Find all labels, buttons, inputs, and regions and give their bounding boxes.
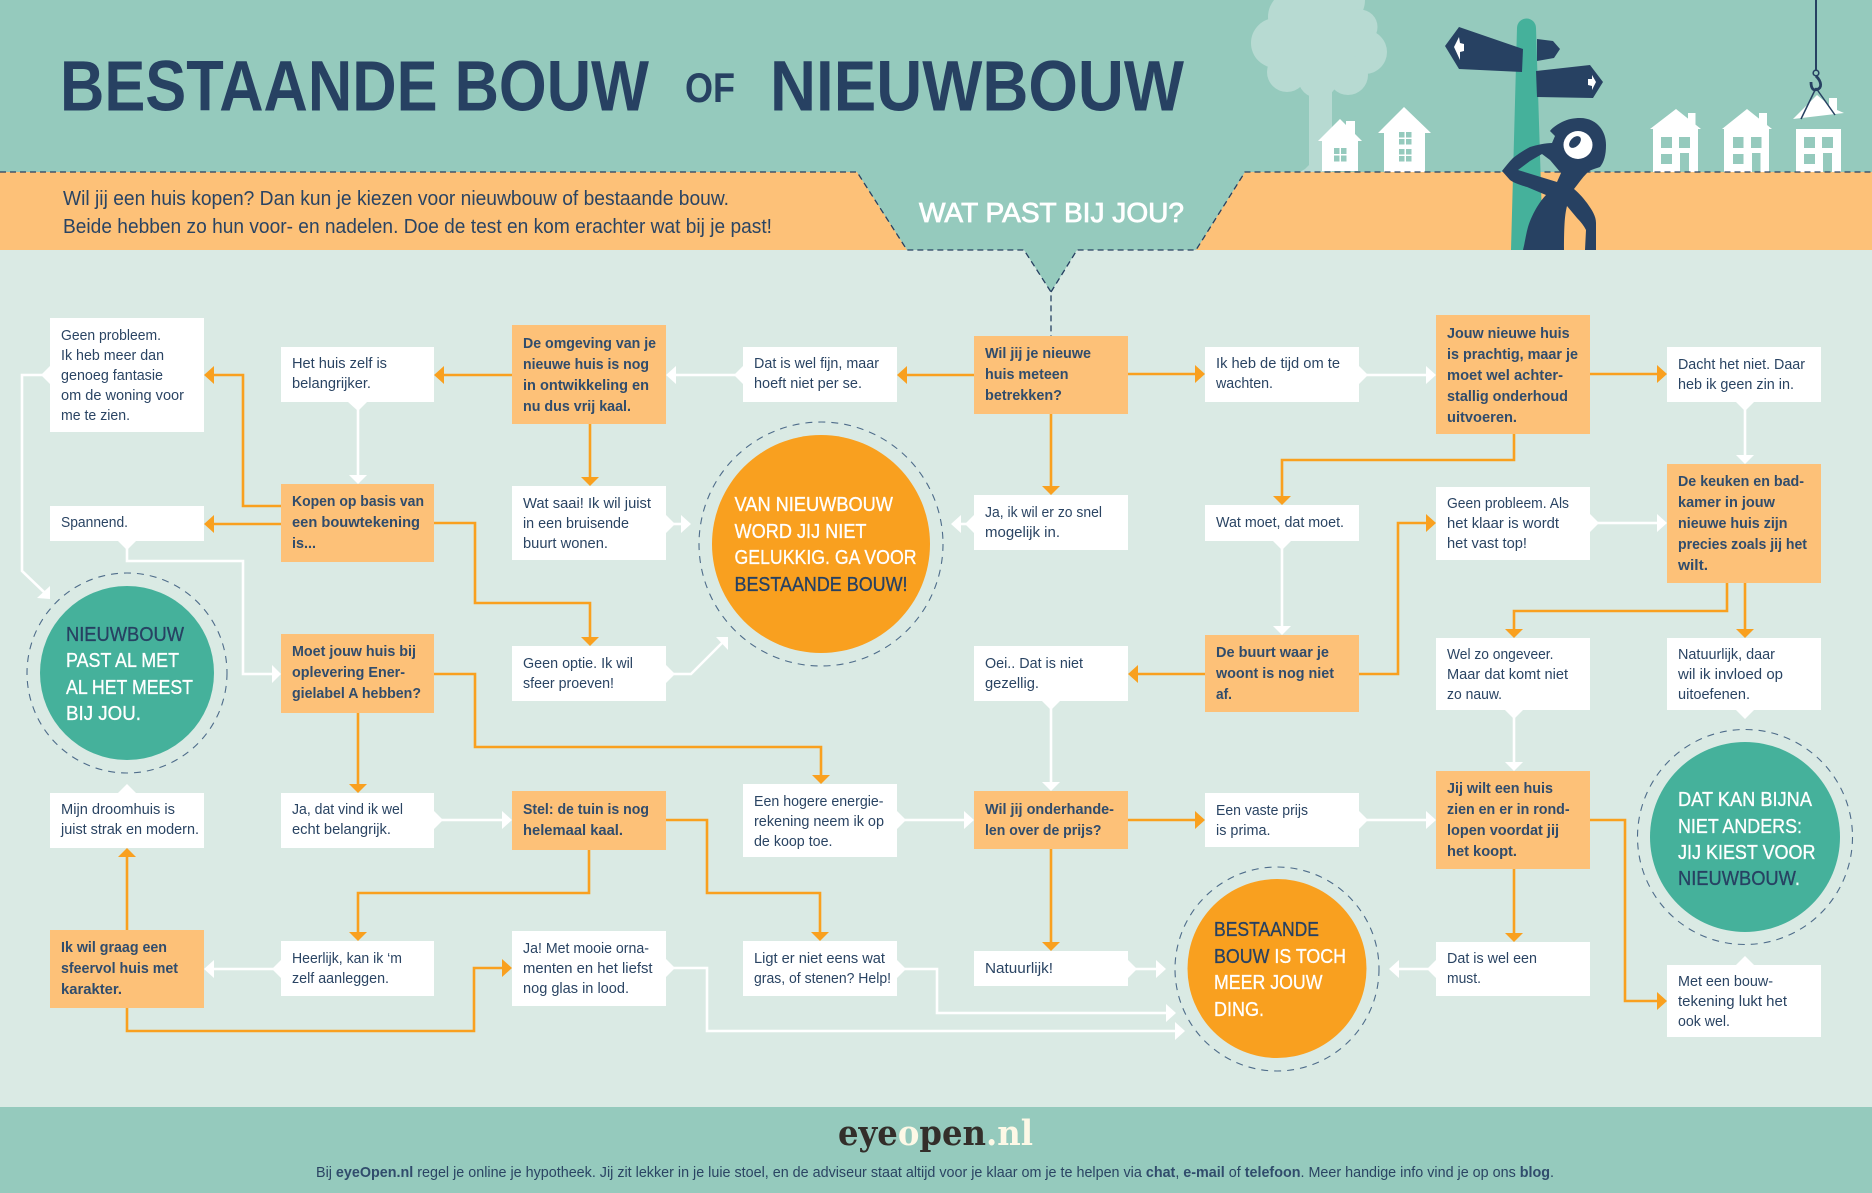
result circle: van nieuwbouw word jij niet gelukkig: BESTAANDE BOUW! [734,574,908,596]
arrow: wil jij to dat is wel fijn [897,366,974,384]
question: de omgeving: De omgeving van je [523,335,656,352]
question: de keuken en badkamer: nieuwe huis zijn [1678,515,1788,532]
illustration: three white houses right [1650,109,1841,172]
answer: ligt er niet eens wat gras [743,941,897,996]
result circle: van nieuwbouw word jij niet gelukkig: GELUKKIG. GA VOOR [734,547,916,569]
arrow: natuurlijk to oranje cirkel [1128,960,1166,978]
title: OF [685,64,735,111]
illustration: thinking person [1502,118,1606,250]
answer: een vaste prijs [1205,793,1359,847]
answer: heerlijk: Heerlijk, kan ik ‘m [292,950,402,967]
arrow: wil jij to ik heb de tijd [1128,365,1205,383]
answer: dat is wel fijn: Dat is wel fijn, maar [754,355,879,372]
answer: ja met mooie ornamenten: nog glas in lood. [523,980,629,997]
arrow: wil jij to ja ik wil [1042,414,1060,495]
arrow: spannend to moet jouw huis [118,541,281,683]
answer: een vaste prijs: Een vaste prijs [1216,802,1308,819]
question: wil jij onderhandelen [974,791,1128,849]
answer: ligt er niet eens wat gras: Ligt er niet eens wat [754,950,886,967]
question: de omgeving: nieuwe huis is nog [523,356,649,373]
arrow: omgeving to het huis [434,366,512,384]
arrow: het huis to kopen [348,402,367,484]
arrow: must to oranje cirkel [1389,960,1436,978]
answer: ja dat vind ik wel: Ja, dat vind ik wel [292,801,403,818]
answer: oei dat is niet gezellig: gezellig. [985,675,1039,692]
answer: ja met mooie ornamenten [512,931,666,1006]
answer: geen optie: Geen optie. Ik wil [523,655,633,672]
band: orange right [1196,172,1872,250]
question: jij wilt een huis zien: Jij wilt een huis [1447,780,1553,797]
title [60,48,1184,126]
answer: dat is wel een must: must. [1447,970,1481,987]
answer: ja dat vind ik wel [281,793,434,848]
arrow: heerlijk to ik wil graag [204,960,281,978]
arrow: onderhandelen to vaste prijs [1128,811,1205,829]
result circle: bestaande bouw is toch meer jouw ding: DING. [1214,999,1264,1021]
answer: natuurlijk daar wil ik invloed op: wil ik invloed op [1677,666,1783,683]
answer: dat is wel een must [1436,942,1590,996]
answer: ja ik wil er zo snel [974,495,1128,550]
answer: geen optie: sfeer proeven! [523,675,614,692]
arrow: de buurt to geen probleem als [1359,514,1436,674]
answer: het huis zelf: Het huis zelf is [292,355,387,372]
question: kopen op basis van een bouwtekening: is... [292,535,316,552]
result circle: dat kan bijna niet anders: DAT KAN BIJNA [1678,789,1813,811]
illustration: roof on crane hook [1793,0,1844,119]
question: de buurt waar je woont: af. [1216,686,1232,703]
answer: heerlijk: zelf aanleggen. [292,970,389,987]
question: stel de tuin: Stel: de tuin is nog [523,801,649,818]
arrow: oei to onderhandelen [1042,701,1060,791]
arrow: hogere energierekening to onderhandelen [897,811,974,829]
answer: natuurlijk [974,951,1128,986]
arrow: stel to heerlijk [349,850,589,941]
arrow: moet jouw huis to ja dat vind [349,713,367,793]
question: ik wil graag een sfeervol huis: Ik wil graag een [61,939,167,956]
arrow: ja met mooie to oranje cirkel [666,959,1185,1040]
footer panel [0,1107,1872,1193]
arrow: jouw nieuwe huis to dacht het niet [1590,365,1667,383]
arrow: kopen to geen optie [434,523,599,646]
arrow: keuken to wel zo ongeveer [1505,583,1727,638]
arrow: geen probleem als to keuken [1590,514,1667,532]
question: ik wil graag een sfeervol huis [50,930,204,1008]
answer: met een bouwtekening: ook wel. [1678,1013,1730,1030]
illustration: signpost [1445,18,1603,250]
answer: oei dat is niet gezellig [974,646,1128,701]
arrow: omgeving to wat saai [581,424,599,486]
answer: dat is wel fijn: hoeft niet per se. [754,375,862,392]
answer: met een bouwtekening: tekening lukt het [1678,993,1788,1010]
arrow: jouw nieuwe huis to wat moet [1273,434,1514,505]
answer: ja met mooie ornamenten: Ja! Met mooie orna- [523,940,649,957]
question: jouw nieuwe huis: stallig onderhoud [1447,388,1568,405]
subtitle: WAT PAST BIJ JOU? [919,197,1184,228]
answer: met een bouwtekening: Met een bouw- [1678,973,1773,990]
intro text [63,188,772,238]
arrow: mijn droomhuis to groene cirkel [118,784,136,793]
band: orange intro left [0,172,907,250]
question: wil jij je nieuwe huis meteen betrekken: betrekken? [985,387,1062,404]
arrow: kopen to spannend [204,515,281,533]
arrow: moet jouw huis to hogere energierekening [434,674,830,784]
arrow: ik heb de tijd to jouw nieuwe huis [1359,366,1436,384]
question: de omgeving: nu dus vrij kaal. [523,398,631,415]
answer: geen probleem: me te zien. [61,407,130,424]
answer: ja dat vind ik wel: echt belangrijk. [292,821,391,838]
answer: een hogere energierekening [743,784,897,857]
arrow: ja dat vind to stel [434,811,512,829]
answer: ik heb de tijd: Ik heb de tijd om te [1216,355,1340,372]
question: stel de tuin: helemaal kaal. [523,822,623,839]
question: moet jouw huis energielabel A [281,634,434,713]
question: de omgeving: in ontwikkeling en [523,377,649,394]
arrow: ik wil graag to mijn droomhuis [118,848,136,930]
question: ik wil graag een sfeervol huis: sfeervol huis met [61,960,178,977]
result circle: nieuwbouw past al met al: AL HET MEEST [66,677,193,699]
question: jouw nieuwe huis: moet wel achter- [1447,367,1563,384]
answer: dacht het niet [1667,347,1821,402]
answer: wat saai: Wat saai! Ik wil juist [523,495,652,512]
answer: wel zo ongeveer: Maar dat komt niet [1447,666,1569,683]
question: de keuken en badkamer: kamer in jouw [1678,494,1775,511]
answer: natuurlijk daar wil ik invloed op: uitoefenen. [1678,686,1750,703]
answer: natuurlijk daar wil ik invloed op: Natuurlijk, daar [1678,646,1775,663]
question: jouw nieuwe huis: is prachtig, maar je [1447,346,1578,363]
answer: ja ik wil er zo snel: Ja, ik wil er zo snel [985,504,1102,521]
question: kopen op basis van een bouwtekening: een bouwtekening [292,514,420,531]
answer: natuurlijk: Natuurlijk! [985,960,1053,977]
result circle: nieuwbouw past al met al [27,573,227,773]
question: jouw nieuwe huis [1436,315,1590,434]
answer: geen probleem: Geen probleem. [61,327,161,344]
answer: mijn droomhuis: juist strak en modern. [60,821,199,838]
answer: een hogere energierekening: rekening neem ik op [754,813,884,830]
answer: ja ik wil er zo snel: mogelijk in. [985,524,1060,541]
arrow: wel zo ongeveer to jij wilt [1505,710,1523,771]
answer: een hogere energierekening: de koop toe. [754,833,832,850]
illustration: tree [1251,0,1387,172]
result circle: van nieuwbouw word jij niet gelukkig [699,422,943,666]
result circle: dat kan bijna niet anders: NIEUWBOUW. [1678,868,1800,890]
arrow: de buurt to oei [1128,665,1205,683]
answer: geen probleem: Ik heb meer dan [61,347,164,364]
answer: ik heb de tijd [1205,347,1359,402]
title: BESTAANDE BOUW [60,48,649,126]
answer: dat is wel een must: Dat is wel een [1447,950,1537,967]
result circle: van nieuwbouw word jij niet gelukkig: VAN NIEUWBOUW [734,494,893,516]
question: ik wil graag een sfeervol huis: karakter. [61,981,122,998]
result circle: nieuwbouw past al met al: BIJ JOU. [66,703,141,725]
arrow: stel to ligt er niet [666,820,829,941]
logo: eyeopen.nl [838,1113,1033,1154]
answer: oei dat is niet gezellig: Oei.. Dat is niet [985,655,1084,672]
answer: het huis zelf [281,347,434,402]
question: kopen op basis van een bouwtekening [281,484,434,562]
arrow: natuurlijk daar to groene cirkel [1736,710,1754,719]
question: wil jij onderhandelen: Wil jij onderhande- [985,801,1114,818]
answer: wat saai [512,486,666,560]
question: wil jij onderhandelen: len over de prijs? [985,822,1102,839]
question: jij wilt een huis zien: het koopt. [1447,843,1517,860]
answer: geen probleem: om de woning voor [61,387,184,404]
answer: dat is wel fijn [743,347,897,402]
header panel [0,0,1872,292]
question: jouw nieuwe huis: Jouw nieuwe huis [1447,325,1570,342]
answer: dacht het niet: heb ik geen zin in. [1678,376,1794,393]
question: moet jouw huis energielabel A: gielabel A hebben? [292,685,421,702]
arrow: jij wilt to met een bouwtekening [1590,820,1667,1010]
arrow: ligt er niet to oranje cirkel [897,960,1176,1022]
result circle: van nieuwbouw word jij niet gelukkig: WORD JIJ NIET [734,521,866,543]
intro text: Beide hebben zo hun voor- en nadelen. Doe de test en kom erachter wat bij je past! [63,216,772,238]
question: kopen op basis van een bouwtekening: Kopen op basis van [292,493,424,510]
arrow: jij wilt to dat is wel een must [1505,869,1523,942]
answer: ja met mooie ornamenten: menten en het liefst [523,960,653,977]
title: NIEUWBOUW [770,48,1184,126]
question: de buurt waar je woont [1205,635,1359,712]
arrow: vaste prijs to jij wilt [1359,811,1436,829]
answer: wel zo ongeveer [1436,638,1590,710]
footer text: Bij eyeOpen.nl regel je online je hypotheek. Jij zit lekker in je luie stoel, en de adviseur staat altijd voor je klaar om je te helpen via chat, e-mail of telefoon. Meer handige info vind je op ons blog. [316,1164,1554,1181]
dashed outline of header banner [0,172,1872,336]
answer: wat moet dat moet: Wat moet, dat moet. [1216,514,1344,531]
answer: wel zo ongeveer: zo nauw. [1447,686,1502,703]
answer: wat saai: in een bruisende [523,515,629,532]
question: de omgeving [512,325,666,424]
answer: geen probleem als: het vast top! [1447,535,1527,552]
result circle: dat kan bijna niet anders [1638,730,1852,944]
answer: dacht het niet: Dacht het niet. Daar [1678,356,1805,373]
answer: wat moet dat moet [1205,505,1359,541]
result circle: bestaande bouw is toch meer jouw ding [1175,867,1379,1071]
arrow: geen probleem to groene cirkel [22,366,50,599]
answer: ik heb de tijd: wachten. [1215,375,1273,392]
answer: geen probleem [50,318,204,432]
answer: mijn droomhuis [50,793,204,848]
answer: geen probleem als [1436,487,1590,560]
arrow: wat moet to de buurt [1273,541,1291,635]
arrow: dacht het niet to keuken [1736,402,1754,464]
question: moet jouw huis energielabel A: oplevering Ener- [292,664,405,681]
answer: heerlijk [281,941,434,996]
question: de keuken en badkamer: wilt. [1677,557,1708,574]
answer: met een bouwtekening [1667,965,1821,1037]
arrow: wat saai to oranje cirkel [666,515,691,533]
answer: geen probleem als: het klaar is wordt [1447,515,1560,532]
answer: ligt er niet eens wat gras: gras, of stenen? Help! [754,970,891,987]
question: de buurt waar je woont: De buurt waar je [1216,644,1329,661]
question: jij wilt een huis zien [1436,771,1590,869]
answer: spannend: Spannend. [61,514,128,531]
arrow: ik wil graag to ja met mooie [127,959,512,1031]
question: jouw nieuwe huis: uitvoeren. [1447,409,1517,426]
question: de keuken en badkamer [1667,464,1821,583]
answer: een vaste prijs: is prima. [1216,822,1270,839]
arrow: keuken to natuurlijk daar [1736,583,1754,638]
answer: natuurlijk daar wil ik invloed op [1667,638,1821,710]
arrow: dat is wel fijn to omgeving [666,366,743,384]
question: moet jouw huis energielabel A: Moet jouw huis bij [292,643,416,660]
answer: geen probleem: genoeg fantasie [61,367,163,384]
answer: geen probleem als: Geen probleem. Als [1447,495,1569,512]
result circle: nieuwbouw past al met al: NIEUWBOUW [66,624,184,646]
arrow: geen optie to oranje cirkel [666,637,728,683]
arrow: kopen to geen probleem [204,366,281,506]
question: de keuken en badkamer: precies zoals jij het [1678,536,1807,553]
result circle: bestaande bouw is toch meer jouw ding: BESTAANDE [1214,919,1319,941]
question: jij wilt een huis zien: zien en er in rond- [1447,801,1570,818]
result circle: bestaande bouw is toch meer jouw ding: MEER JOUW [1214,972,1323,994]
answer: het huis zelf: belangrijker. [292,375,371,392]
result circle: nieuwbouw past al met al: PAST AL MET [66,650,179,672]
result circle: dat kan bijna niet anders: NIET ANDERS: [1678,816,1802,838]
question: wil jij je nieuwe huis meteen betrekken: Wil jij je nieuwe [985,345,1091,362]
answer: een hogere energierekening: Een hogere energie- [754,793,884,810]
answer: spannend [50,506,204,541]
answer: wel zo ongeveer: Wel zo ongeveer. [1447,646,1554,663]
intro text: Wil jij een huis kopen? Dan kun je kiezen voor nieuwbouw of bestaande bouw. [63,188,729,210]
question: de buurt waar je woont: woont is nog niet [1215,665,1334,682]
illustration: two white houses left [1318,107,1431,172]
question: de keuken en badkamer: De keuken en bad- [1678,473,1804,490]
result circle: bestaande bouw is toch meer jouw ding: BOUW IS TOCH [1214,946,1346,968]
arrow: onderhandelen to natuurlijk [1042,849,1060,951]
answer: wat saai: buurt wonen. [523,535,608,552]
question: wil jij je nieuwe huis meteen betrekken: huis meteen [985,366,1068,383]
question: jij wilt een huis zien: lopen voordat jij [1447,822,1559,839]
answer: geen optie [512,646,666,701]
arrow: met een bouwtekening to groene cirkel [1736,956,1754,965]
answer: mijn droomhuis: Mijn droomhuis is [61,801,175,818]
result circle: dat kan bijna niet anders: JIJ KIEST VOOR [1678,842,1816,864]
question: stel de tuin [512,791,666,850]
question: wil jij je nieuwe huis meteen betrekken [974,336,1128,414]
arrow: ja ik wil to oranje cirkel [951,515,974,533]
